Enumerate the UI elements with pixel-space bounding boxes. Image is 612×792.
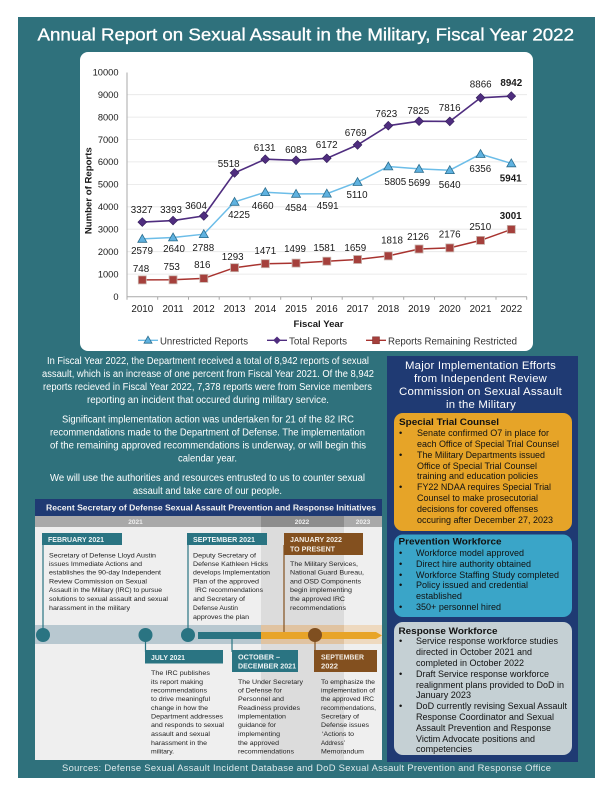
panel heading: from Independent Review [414,373,547,385]
y axis tick labels: 6000 [98,157,118,167]
card: special trial counsel: occuring after December 27, 2023 [417,515,553,525]
milestone: January 2022 to present: National Guard Bureau, [290,570,364,576]
milestone: October to December 2021: of Defense for [238,688,283,694]
card: prevention workforce: • [399,559,402,569]
milestone: October to December 2021: Personnel and [238,696,284,703]
card: special trial counsel: • [399,450,402,460]
data labels: unrestricted reports: 5640 [439,180,461,191]
chart legend [138,336,517,347]
milestone: September 2022: 2022 [321,662,338,670]
card: response workforce: Victim Advocate positions and [416,734,535,744]
data labels: total reports: 5518 [218,159,240,170]
x axis year labels: 2019 [408,304,430,315]
panel heading [399,360,562,411]
data labels: total reports: 7816 [439,103,461,114]
y axis tick labels: 4000 [98,202,118,212]
data labels: reports remaining restricted: 748 [133,264,150,275]
milestone: September 2022: To emphasize the [321,679,375,686]
data labels: unrestricted reports: 5941 [500,174,522,184]
milestone: September 2022: Secretary of [321,714,359,720]
milestone: October to December 2021: DECEMBER 2021 [238,662,296,670]
milestone: September 2022: implementation of [321,688,375,694]
data labels: reports remaining restricted: 3001 [500,211,522,222]
milestone: July 2021: its report making [151,679,203,686]
milestone: July 2021: military. [151,748,174,756]
milestone: October to December 2021: implementing [238,731,280,738]
card: prevention workforce [394,534,572,617]
x axis year labels: 2020 [439,304,461,315]
milestone: February 2021: Review Commission on Sexual [49,578,148,586]
milestone: July 2021: JULY 2021 [151,653,185,662]
milestone: February 2021 [42,533,169,612]
data labels: reports remaining restricted: 1581 [313,243,335,254]
card: prevention workforce: Policy issued and credential [416,580,528,590]
data labels: unrestricted reports: 5699 [408,178,430,189]
card: response workforce: Service response workforce studies [416,636,558,646]
milestone: September 2022: Defense issues [321,722,370,729]
data labels: total reports: 6131 [254,143,276,154]
text block: summary: In Fiscal Year 2022, the Department received a total of 8,942 reports of sexual [47,356,369,367]
timeline header [35,499,382,516]
milestone: September 2021 [187,533,270,621]
text block: summary: Significant implementation action was undertaken for 21 of the 82 IRC [62,414,354,426]
card: prevention workforce: established [416,591,462,601]
x axis year labels: 2016 [316,304,338,315]
data labels: total reports: 8942 [500,78,523,89]
milestone: February 2021: issues Immediate Actions and [49,561,142,568]
data labels: reports remaining restricted: 1293 [222,252,244,263]
card: special trial counsel: Counsel to make prosecutorial [417,493,538,503]
chart legend: Reports Remaining Restricted [388,336,517,347]
milestone: February 2021: Assault in the Military (IRC) to pursue [49,587,162,594]
x axis year labels: 2021 [470,304,491,315]
card: special trial counsel: • [399,482,402,492]
panel heading: Major Implementation Efforts [405,360,556,372]
x axis year labels [131,304,522,315]
card: special trial counsel: training and education policies [417,471,538,481]
milestone: September 2022: the approved IRC [321,696,374,703]
data labels: total reports: 3604 [185,201,207,212]
milestone: September 2022: SEPTEMBER [321,652,365,662]
card: response workforce: completed in October 2022 [416,658,524,668]
timeline band and arrow [35,625,382,644]
data labels: unrestricted reports: 2640 [163,244,185,255]
card: prevention workforce: Workforce model approved [416,548,524,558]
data labels: unrestricted reports: 4591 [317,201,339,212]
year bar [35,516,382,527]
milestone: September 2022: recommendations, [321,705,376,712]
milestone: October to December 2021: Readiness provides [238,705,301,712]
y axis tick labels: 7000 [98,135,118,145]
text block: summary: We will use the authorities and resources entrusted to us to counter sexual [50,473,365,484]
card: special trial counsel [394,413,572,531]
milestone: October to December 2021: recommendations [238,748,295,756]
y axis tick labels: 1000 [98,269,118,279]
card: prevention workforce: • [399,570,402,580]
data labels: reports remaining restricted [133,211,522,275]
card: response workforce: DoD currently revising Sexual Assault [416,701,567,711]
text block: summary: assault, which is an increase of one percent from Fiscal Year 2021. Of the 8,942 [42,369,374,380]
data labels: total reports: 6769 [345,128,367,139]
milestone: September 2022: Address’ [321,740,345,747]
milestone: October to December 2021: OCTOBER – [238,652,280,662]
milestone: January 2022 to present: TO PRESENT [290,544,335,554]
series: reports remaining restricted [142,229,511,280]
milestone: September 2021: develops Implementation [193,570,270,576]
card: special trial counsel: each Office of Special Trial Counsel [417,439,559,449]
milestone: September 2022: ‘Actions to [322,731,354,738]
card: response workforce: • [399,701,402,711]
card: special trial counsel: decisions for covered offenses [417,504,538,514]
milestone: September 2021: and Secretary of [193,596,245,603]
text block: summary: assault and take care of our people. [133,486,282,497]
card: response workforce: Draft Service response workforce [416,669,549,679]
card: special trial counsel: Special Trial Counsel [399,416,499,427]
panel heading: Commission on Sexual Assault [399,386,562,398]
x axis year labels: 2017 [347,304,368,315]
year bar: 2023 [356,519,371,526]
chart axes [127,72,527,300]
year bar: 2022 [295,519,310,526]
card: response workforce [394,622,572,755]
data labels: reports remaining restricted: 1499 [284,244,306,255]
milestone: September 2021: Deputy Secretary of [193,552,256,560]
milestone: July 2021: harassment in the [151,740,207,747]
data labels: unrestricted reports: 4584 [285,203,307,214]
timeline connectors [43,533,315,652]
data labels: total reports: 6172 [316,140,338,151]
milestone: September 2021: Defense Austin [193,605,238,612]
data labels: reports remaining restricted: 753 [164,262,180,273]
milestone: July 2021: and responds to sexual [151,722,225,729]
data labels: total reports [131,78,523,216]
panel: timeline [35,499,382,760]
card: response workforce: Response Coordinator and Sexual [416,712,554,722]
milestone: September 2021: IRC recommendations [195,587,264,594]
card: prevention workforce: • [399,602,402,612]
x axis year labels: 2018 [377,304,400,315]
card: special trial counsel: Senate confirmed O7 in place for [417,428,549,438]
milestone: July 2021: change in how the [151,705,208,712]
x axis title: Fiscal Year [294,319,344,330]
data labels: reports remaining restricted: 2126 [407,232,429,243]
card: response workforce: • [399,636,402,646]
data labels: total reports: 8866 [470,80,492,90]
y axis title: Number of Reports [84,147,94,234]
y axis tick labels: 5000 [98,180,118,190]
data labels: reports remaining restricted: 816 [194,260,211,271]
milestone: October to December 2021 [232,650,304,756]
milestone: January 2022 to present: JANUARY 2022 [290,535,342,544]
milestone: October to December 2021: The Under Secretary [238,679,304,686]
x axis year labels: 2011 [162,304,184,315]
card: special trial counsel: FY22 NDAA requires Special Trial [417,482,551,492]
data labels: unrestricted reports: 6356 [469,164,492,175]
milestone: January 2022 to present: the approved IRC [290,596,345,603]
timeline milestone dots [36,628,322,642]
milestone: February 2021: harassment in the military [49,605,131,612]
y axis tick labels: 0 [113,292,118,302]
year bar: 2021 [128,519,143,526]
milestone: July 2021: recommendations [151,688,208,694]
milestone: January 2022 to present: The Military Services, [290,561,358,568]
timeline header: Recent Secretary of Defense Sexual Assault Prevention and Response Initiatives [46,502,376,512]
card: special trial counsel: • [399,428,402,438]
milestone: July 2021: The IRC publishes [151,670,211,677]
data labels: total reports: 3393 [160,205,182,216]
sources footer: Sources: Defense Sexual Assault Incident Database and DoD Sexual Assault Prevention and Response Office [62,762,551,773]
x axis year labels: 2012 [193,304,215,315]
card: prevention workforce: 350+ personnel hired [416,602,501,612]
milestone: September 2021: approves the plan [193,614,249,621]
card: prevention workforce: Workforce Staffing Study completed [416,570,559,580]
text block: summary: recommendations made to the Department of Defense. The implementation [50,428,365,438]
milestone: January 2022 to present: and OSD Components [290,578,362,586]
card: special trial counsel: The Military Departments issued [417,450,545,460]
milestone: February 2021: FEBRUARY 2021 [48,535,104,544]
data labels: reports remaining restricted: 2510 [469,222,492,233]
milestone: July 2021 [145,650,225,756]
y axis tick labels: 8000 [98,112,118,122]
card: prevention workforce: Direct hire authority obtained [416,559,531,569]
card: response workforce: Response Workforce [398,625,498,636]
milestone: July 2021: assault and sexual [151,731,211,738]
milestone: July 2021: Department addresses [151,714,224,720]
series: unrestricted reports [142,154,511,239]
x axis year labels: 2015 [285,304,307,315]
y axis tick labels [93,68,118,302]
text block: summary: of the remaining approved recommendations is underway, or will begin this [50,440,366,452]
milestone: January 2022 to present: recommendations [290,605,347,612]
chart gridlines [127,95,527,274]
data labels: unrestricted reports: 2788 [192,243,215,254]
x axis year labels: 2013 [224,304,246,315]
data labels: total reports: 7623 [375,109,398,120]
data labels: unrestricted reports: 5805 [384,177,407,188]
data labels: total reports: 3327 [131,205,153,216]
milestone: September 2021: Defense Kathleen Hicks [193,561,269,568]
text block: summary [42,356,374,497]
panel heading: in the Military [446,399,516,411]
x axis year labels: 2022 [500,304,522,315]
data labels: reports remaining restricted: 2176 [439,230,461,240]
milestone: October to December 2021: the approved [238,740,279,747]
text block: summary: calendar year. [178,454,237,464]
milestone: September 2021: Plan of the approved [193,578,259,586]
x axis year labels: 2010 [131,304,154,315]
y axis tick labels: 3000 [98,224,118,234]
data labels: unrestricted reports: 4225 [228,210,250,221]
data labels: unrestricted reports [131,164,522,257]
card: response workforce: competencies [416,744,472,754]
milestone: February 2021: establishes the 90-day Independent [49,570,161,576]
milestone: February 2021: Secretary of Defense Lloyd Austin [49,552,156,560]
data labels: unrestricted reports: 4660 [252,201,274,212]
card: prevention workforce: Prevention Workforce [398,536,502,546]
milestone: September 2021: SEPTEMBER 2021 [193,535,255,544]
y axis tick labels: 9000 [98,90,118,100]
milestone: October to December 2021: implementation [238,714,286,720]
data labels: reports remaining restricted: 1471 [254,246,276,257]
data labels: reports remaining restricted: 1818 [381,236,403,246]
series: total reports [142,96,511,222]
title: Annual Report on Sexual Assault in the Military, Fiscal Year 2022 [38,24,574,44]
data labels: reports remaining restricted: 1659 [344,243,366,254]
card: response workforce: January 2023 [416,690,471,700]
card: response workforce: realignment plans provided to DoD in [416,680,564,690]
x axis year labels: 2014 [254,304,277,315]
card: prevention workforce: • [399,580,402,590]
card: response workforce: directed in October 2021 and [416,647,532,657]
data labels: total reports: 6083 [285,145,307,156]
milestone: July 2021: to drive meaningful [151,696,211,703]
milestone: February 2021: solutions to sexual assault and sexual [49,596,169,603]
y axis tick labels: 2000 [98,247,118,257]
panel: line chart [80,52,533,351]
data labels: total reports: 7825 [407,106,430,117]
text block: summary: reporting an incident that occured during military service. [87,395,329,406]
y axis tick labels: 10000 [93,68,118,78]
chart legend: Unrestricted Reports [160,336,248,347]
milestone: January 2022 to present: begin implementing [290,587,352,594]
data labels: unrestricted reports: 5110 [346,190,368,201]
card: response workforce: • [399,669,402,679]
milestone: October to December 2021: guidance for [238,722,277,729]
card: prevention workforce: • [399,548,402,558]
milestone: September 2022: Memorandum [321,748,365,756]
card: special trial counsel: Office of Special Trial Counsel [417,461,537,471]
text block: summary: reports recieved in Fiscal Year 2022, 7,378 reports were from Service members [43,382,372,393]
milestone: January 2022 to present [284,533,364,612]
panel: major implementation efforts [387,356,578,762]
chart legend: Total Reports [289,336,347,347]
card: response workforce: Assault Prevention and Response [416,723,551,733]
data labels: unrestricted reports: 2579 [131,246,153,257]
milestone: September 2022 [314,650,377,756]
